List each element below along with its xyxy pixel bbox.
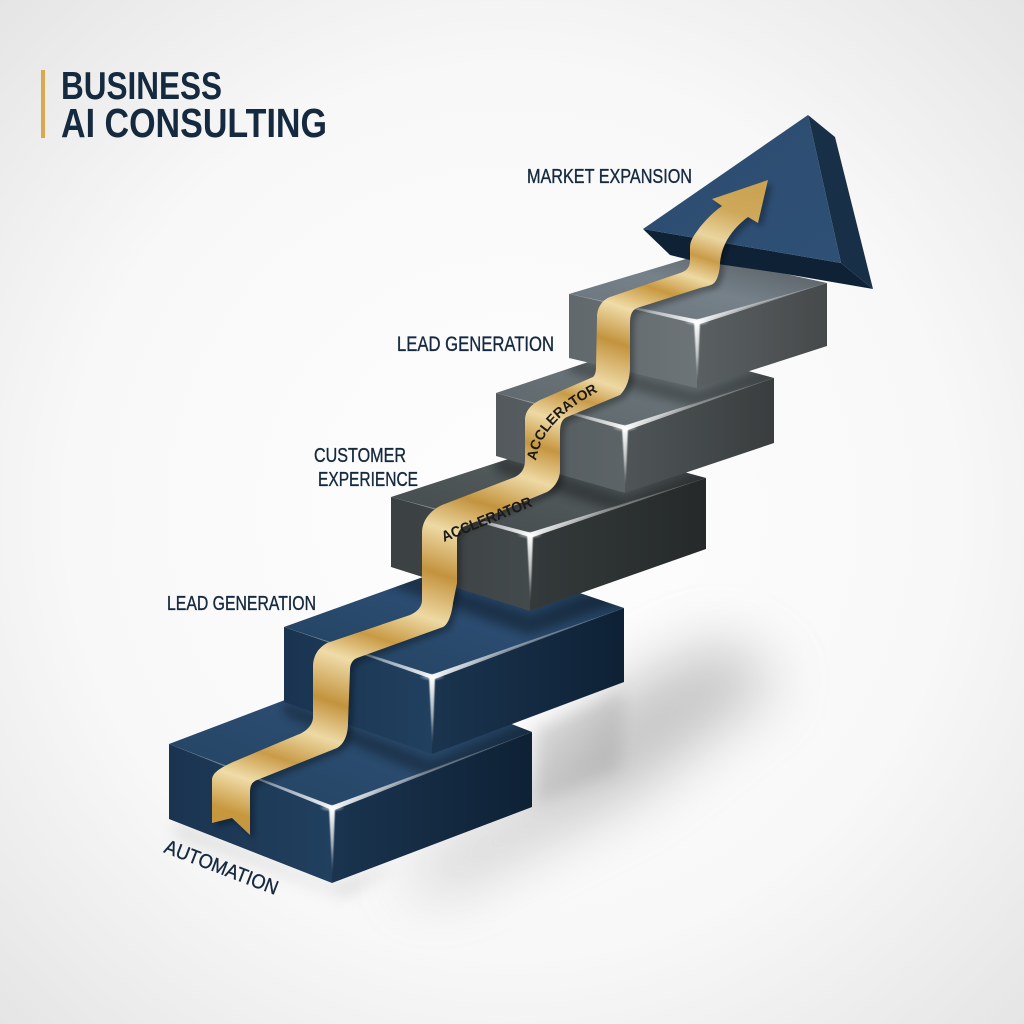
label: automation: AUTOMATION	[161, 836, 281, 900]
gold ribbon arrow	[212, 180, 773, 837]
ground shadow	[175, 640, 780, 896]
arrowhead pyramid	[643, 115, 873, 289]
title: BUSINESS	[61, 65, 222, 108]
ribbon label: acclerator lower: ACCLERATOR	[439, 494, 535, 546]
label: lead generation lower: LEAD GENERATION	[167, 593, 316, 615]
step 3: customer experience block	[391, 440, 706, 611]
title accent bar	[41, 70, 45, 138]
title: AI CONSULTING	[61, 100, 327, 146]
title	[41, 65, 327, 146]
label: customer experience: EXPERIENCE	[318, 469, 418, 491]
step 1: automation block	[169, 668, 532, 883]
step 2 shadow on step 1	[281, 702, 532, 776]
label: market expansion: MARKET EXPANSION	[527, 166, 692, 188]
ribbon label: acclerator upper: ACCLERATOR	[527, 384, 598, 460]
step 4 shadow on step 3	[494, 460, 706, 512]
step 2: lead generation block	[284, 558, 624, 754]
step 3 shadow on step 2	[392, 578, 618, 638]
step 4: block	[496, 343, 774, 493]
step 5: lead generation block	[569, 255, 827, 388]
label: customer experience: CUSTOMER	[314, 445, 406, 467]
label: customer experience	[314, 445, 418, 491]
step 5 shadow on step 4	[566, 362, 774, 409]
label: lead generation upper: LEAD GENERATION	[397, 333, 554, 356]
